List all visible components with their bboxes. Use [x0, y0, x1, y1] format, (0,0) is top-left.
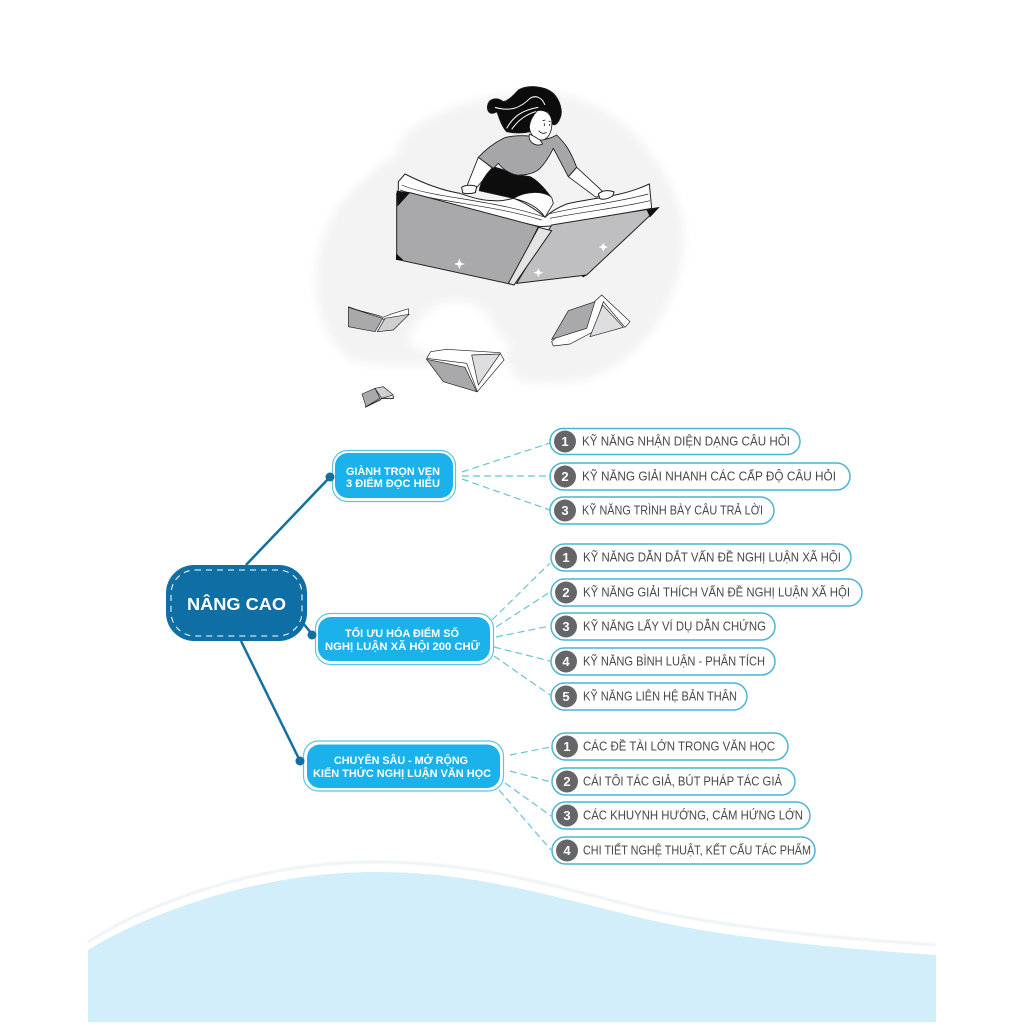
branch 1: GIÀNH TRỌN VẸN: [346, 465, 440, 478]
book pages: [398, 174, 652, 227]
skill 2.1: 1: [562, 550, 570, 565]
skill 2.5: 5: [562, 689, 570, 704]
cloud cutout: [409, 301, 511, 356]
book right cover: [517, 208, 658, 283]
main node: NÂNG CAO: [166, 565, 307, 641]
skill 3.4: CHI TIẾT NGHỆ THUẬT, KẾT CẤU TÁC PHẨM: [583, 842, 811, 858]
book left cover: [397, 193, 538, 284]
facial features: [539, 120, 551, 133]
skill 2.2: 2: [562, 585, 570, 600]
skill 2.2: [551, 579, 862, 606]
small book: bottom left: [362, 387, 393, 407]
left arm: [467, 157, 493, 188]
skill 1.1: 1: [561, 434, 569, 449]
skill 2.5: [551, 683, 747, 710]
branch 2: [308, 614, 494, 664]
skill 3.2: CÁI TÔI TÁC GIẢ, BÚT PHÁP TÁC GIẢ: [583, 774, 783, 788]
small book: upper left: [348, 307, 409, 332]
hands: [462, 185, 614, 199]
small book: middle: [427, 349, 504, 392]
skill 2.1: [551, 544, 851, 571]
branch 3: CHUYÊN SÂU - MỞ RỘNG: [334, 754, 468, 767]
branch 2: TỐI ƯU HÓA ĐIỂM SỐ: [345, 626, 459, 640]
skill 2.3: [551, 613, 775, 640]
skill 3.3: 3: [563, 808, 571, 823]
collar: [529, 134, 543, 145]
branch 1: [326, 450, 456, 502]
skill 2.2: KỸ NĂNG GIẢI THÍCH VẤN ĐỀ NGHỊ LUẬN XÃ HỘI: [583, 584, 850, 600]
skill 3.4: 4: [563, 843, 571, 858]
skill 2.4: [551, 648, 775, 675]
skill 2.4: 4: [562, 654, 570, 669]
skirt: [479, 167, 551, 198]
skill 1.2: KỸ NĂNG GIẢI NHANH CÁC CẤP ĐỘ CÂU HỎI: [582, 468, 836, 484]
woman: [467, 87, 604, 217]
leg: [513, 192, 553, 217]
skills group 1: [550, 428, 850, 524]
skill 1.3: KỸ NĂNG TRÌNH BÀY CÂU TRẢ LỜI: [582, 502, 763, 518]
branch 3: [296, 741, 504, 791]
skill 3.3: CÁC KHUYNH HƯỚNG, CẢM HỨNG LỚN: [583, 808, 803, 822]
skills group 3: [552, 733, 815, 864]
skill 1.3: [550, 497, 774, 524]
branch 2: NGHỊ LUẬN XÃ HỘI 200 CHỮ: [325, 640, 481, 653]
wave background: [88, 862, 936, 1022]
skills group 2: [551, 544, 862, 710]
sparkles: [454, 243, 608, 277]
skill 3.2: [552, 768, 795, 795]
dashed links: [462, 443, 551, 850]
branch 3: KIẾN THỨC NGHỊ LUẬN VĂN HỌC: [313, 767, 491, 780]
skill 2.1: KỸ NĂNG DẪN DẮT VẤN ĐỀ NGHỊ LUẬN XÃ HỘI: [583, 550, 841, 564]
face: [529, 110, 552, 140]
skill 2.3: 3: [562, 619, 570, 634]
skill 3.3: [552, 802, 810, 829]
skill 2.3: KỸ NĂNG LẤY VÍ DỤ DẪN CHỨNG: [583, 618, 766, 634]
skill 1.1: KỸ NĂNG NHẬN DIỆN DẠNG CÂU HỎI: [582, 434, 790, 448]
hair: [487, 87, 561, 133]
skill 1.2: [550, 463, 850, 490]
shirt: [478, 135, 577, 177]
cloud backdrop: [316, 93, 684, 383]
skill 3.4: [552, 837, 815, 864]
skill 2.4: KỸ NĂNG BÌNH LUẬN - PHÂN TÍCH: [583, 654, 765, 668]
skill 3.1: 1: [563, 739, 571, 754]
right arm: [568, 167, 604, 197]
skill 3.1: [552, 733, 788, 760]
skill 2.5: KỸ NĂNG LIÊN HỆ BẢN THÂN: [583, 688, 737, 704]
small book: right: [552, 295, 630, 346]
skill 3.1: CÁC ĐỀ TÀI LỚN TRONG VĂN HỌC: [583, 738, 775, 754]
branch 1: 3 ĐIỂM ĐỌC HIỂU: [346, 477, 440, 490]
skill 1.1: [550, 428, 800, 454]
book spine: [508, 227, 552, 285]
skill 1.2: 2: [561, 469, 569, 484]
illustration: girl riding a flying book: [316, 87, 684, 407]
skill 1.3: 3: [561, 503, 569, 518]
connector lines: [241, 477, 330, 761]
main node: NÂNG CAO: NÂNG CAO: [187, 593, 286, 614]
skill 3.2: 2: [563, 774, 571, 789]
